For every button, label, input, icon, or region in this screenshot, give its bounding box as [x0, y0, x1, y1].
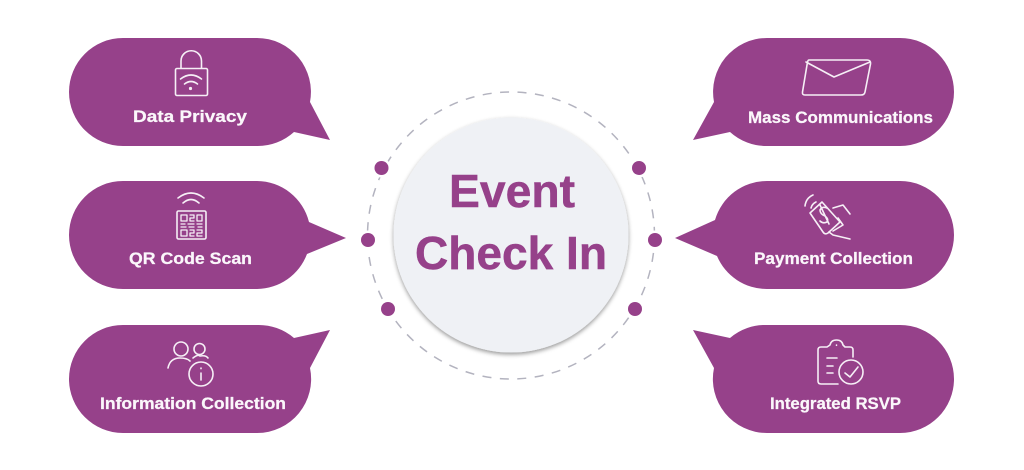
label: Data Privacy: Data Privacy — [133, 107, 248, 126]
panel: Information Collection — [69, 325, 330, 433]
label: Integrated RSVP: Integrated RSVP — [770, 394, 901, 413]
icon: contactless payment hand — [805, 195, 850, 239]
panel: Payment Collection — [675, 181, 954, 289]
icon: clipboard with check — [818, 340, 863, 384]
panel: Data Privacy — [69, 38, 330, 146]
dashed orbit ring — [368, 92, 654, 379]
icon: people with info badge — [168, 342, 213, 386]
orbit dots — [361, 161, 662, 316]
central circle: Event Check In — [394, 118, 628, 352]
panel: Mass Communications — [693, 38, 954, 146]
central circle: Event Check In: Event — [449, 165, 575, 217]
label: Payment Collection: Payment Collection — [754, 249, 913, 268]
panel: QR Code Scan — [69, 181, 346, 289]
icon: QR code with signal — [177, 193, 206, 239]
icon: envelope — [802, 60, 871, 95]
label: QR Code Scan: QR Code Scan — [129, 249, 252, 268]
label: Mass Communications: Mass Communications — [748, 108, 933, 127]
panel: Integrated RSVP — [693, 325, 954, 433]
icon: lock with wifi — [176, 51, 208, 96]
label: Information Collection: Information Collection — [100, 394, 286, 413]
central circle: Event Check In: Check In — [415, 227, 607, 279]
